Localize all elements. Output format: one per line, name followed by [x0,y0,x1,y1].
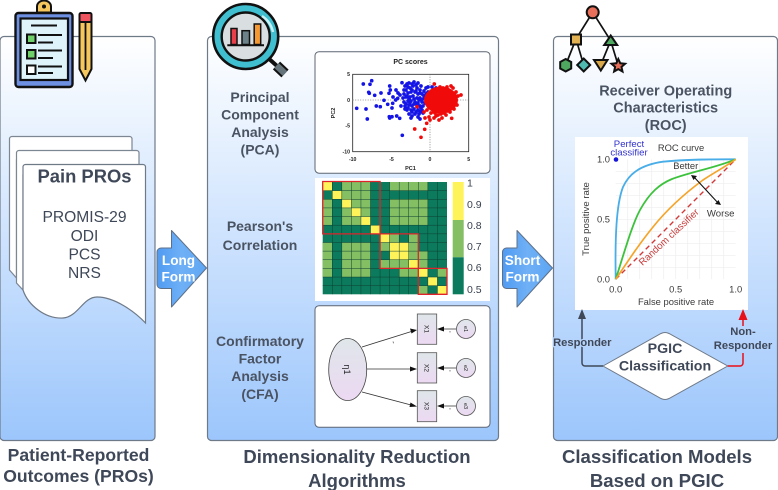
label: Pearson's Correlation [223,218,297,253]
label: PCA: Component [221,106,299,122]
stacked documents: Pain PROs [10,136,146,323]
heatmap diagonal yellow cells [323,182,447,294]
chart: ROC curve: 0.0 [597,274,610,284]
chart: PCA scatter plot: 5 [467,157,470,163]
heatmap colour bar: 0.6 [467,262,482,274]
chart: PCA scatter plot: 0 [429,157,432,163]
PGIC classification diamond [603,332,728,400]
label: PCA: Analysis [231,124,289,140]
chart: PCA scatter plot: -5 [345,124,350,130]
diagram: CFA path model: η1 [342,364,352,375]
diagram: CFA path model: X2 [422,364,430,372]
arrow: Long Form: Form [162,270,195,284]
icon: decision tree [560,6,625,71]
heatmap colour bar: 0.7 [467,241,482,253]
icon: pencil [80,13,92,80]
label: CFA: Analysis [231,368,289,384]
diagram: CFA path model: X3 [422,402,430,410]
arrow: Short Form: Short [505,253,541,268]
arrow: responder: Responder [553,337,612,349]
caption: Classification Models: Classification Models [562,446,752,467]
heading: Pain PROs: Pain PROs [37,166,132,186]
label: ROC title: Characteristics [613,100,718,116]
icon: clipboard [16,1,72,87]
chart: ROC curve: True positive rate [581,182,592,256]
arrow: Long Form [157,230,206,307]
caption: Patient-Reported Outcomes [3,445,154,486]
diagram: CFA path model: e2 [462,365,468,371]
arrow: Short Form [502,230,552,307]
list of instruments: PROMIS-29 [42,209,127,226]
caption: Classification Models [562,446,752,490]
chart: ROC curve: Worse [707,208,734,220]
caption: Patient-Reported Outcomes: Patient-Reported [8,445,149,465]
chart: PCA scatter plot: PC scores [393,59,428,66]
diagram: CFA path model: e1 [462,326,468,332]
chart: PCA scatter plot [315,52,490,173]
chart: PCA scatter plot: -5 [389,157,394,163]
chart: PCA scatter plot: PC2 [331,108,337,118]
heatmap light-green cells [323,182,447,294]
chart: PCA scatter plot: 5 [347,72,350,78]
chart: ROC curve: 1.0 [597,154,610,164]
list of instruments [42,209,127,282]
label: CFA: Factor [239,350,282,366]
heatmap colour bar: 0.8 [467,220,482,232]
arrow: non-responder: Non- [730,326,756,338]
heatmap colour bar: 1 [467,178,473,190]
PGIC classification diamond: PGIC [648,341,682,357]
chart: ROC curve [575,137,748,310]
diagram: CFA path model [315,306,490,427]
heatmap colour bar: 0.9 [467,199,482,211]
arrow: Short Form: Form [506,270,539,284]
heatmap colour bar: 0.5 [467,284,482,296]
PGIC classification diamond: Classification [619,358,711,374]
label: CFA [216,333,304,402]
chart: PCA scatter plot: -10 [349,157,357,163]
arrow: responder [553,309,612,366]
label: CFA: Confirmatory [216,333,304,349]
chart: Pearson correlation heatmap [315,178,490,301]
caption: Dimensionality Reduction Algorithms: Dimensionality Reduction [243,446,471,467]
chart: ROC curve: 0.5 [669,284,682,294]
arrow: Long Form: Long [162,253,195,268]
chart: ROC curve: ROC curve [658,142,704,153]
chart: ROC curve: Perfect [614,139,645,150]
label: PCA [221,89,299,158]
panel: classification models [554,36,778,440]
caption: Dimensionality Reduction Algorithms [243,446,471,490]
panel: dimensionality reduction [208,36,498,440]
chart: ROC curve: Random classifier [637,207,702,268]
label: PCA: (PCA) [241,142,279,158]
label: Pearson's Correlation: Correlation [223,237,297,253]
chart: PCA scatter plot: PC1 [405,166,416,172]
chart: ROC curve: 0.5 [597,214,610,224]
label: PCA: Principal [230,89,290,105]
panel: patient-reported outcomes [0,36,155,440]
label: ROC title [599,84,732,134]
label: ROC title: Receiver Operating [599,84,732,100]
chart: ROC curve: Better [673,160,698,171]
list of instruments: ODI [71,228,98,245]
diagram: CFA path model: e3 [462,403,468,409]
chart: ROC curve: False positive rate [638,296,714,307]
chart: ROC curve: 1.0 [729,284,742,294]
heatmap colour bar [453,178,482,296]
caption: Patient-Reported Outcomes: Outcomes (PROs) [3,466,154,486]
label: CFA: (CFA) [241,386,279,402]
chart: ROC curve: classifier [610,148,648,158]
diagram: CFA path model: X1 [422,325,430,333]
arrow: non-responder: Responder [714,340,773,352]
chart: PCA scatter plot: -10 [342,150,350,156]
chart: ROC curve: 0.0 [609,284,622,294]
chart: PCA scatter plot: 0 [347,98,350,104]
arrow: non-responder [714,309,773,366]
list of instruments: PCS [68,246,101,264]
label: Pearson's Correlation: Pearson's [227,218,293,234]
label: ROC title: (ROC) [645,118,687,134]
list of instruments: NRS [68,265,101,282]
icon: magnifying glass with bars [213,4,285,74]
